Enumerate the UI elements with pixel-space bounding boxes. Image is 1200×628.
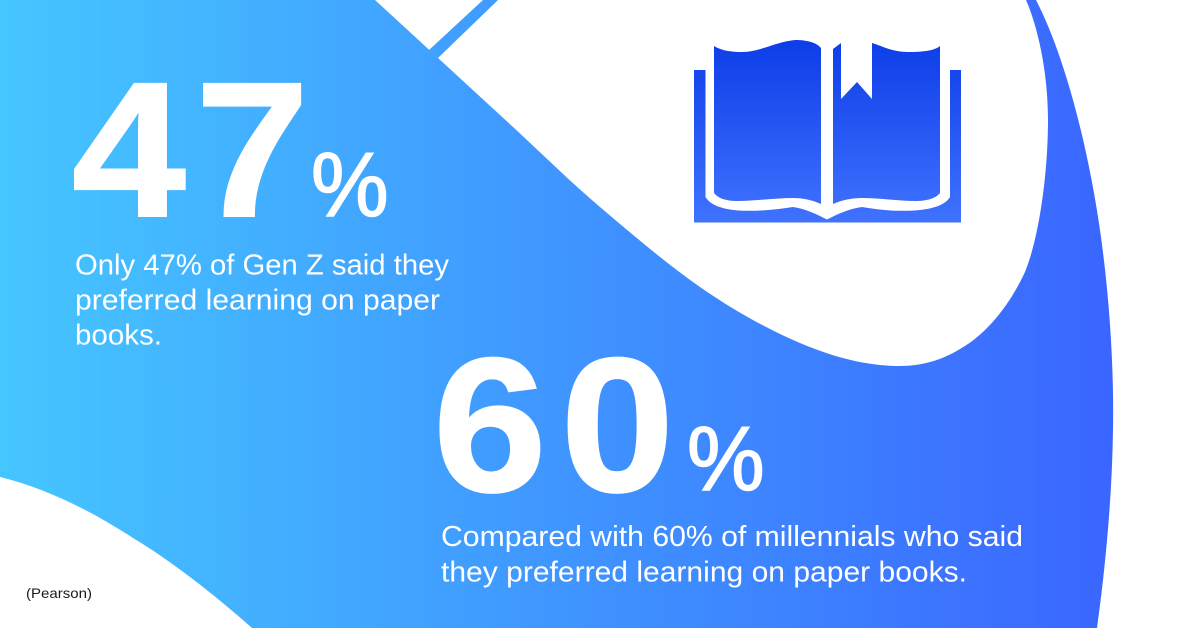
source note: (Pearson): [26, 585, 92, 601]
number: 60: 60: [433, 318, 688, 532]
text: Gen Z description: Only 47% of Gen Z said they: [75, 250, 449, 282]
stat: 47%: [72, 43, 389, 258]
percent sign: %: [687, 407, 765, 509]
stat: 60%: [433, 318, 765, 532]
thin diagonal stripe: [429, 0, 498, 58]
text: Gen Z description: [75, 250, 449, 352]
number: 47: 47: [72, 43, 319, 258]
percent sign: %: [311, 133, 389, 235]
text: Gen Z description: preferred learning on paper: [75, 284, 440, 316]
text: millennials description: [441, 521, 1023, 588]
text: millennials description: they preferred learning on paper books.: [441, 556, 967, 588]
icon: open book with bookmark: [694, 40, 961, 222]
text: Gen Z description: books.: [75, 320, 162, 352]
text: millennials description: Compared with 60% of millennials who said: [441, 521, 1023, 553]
